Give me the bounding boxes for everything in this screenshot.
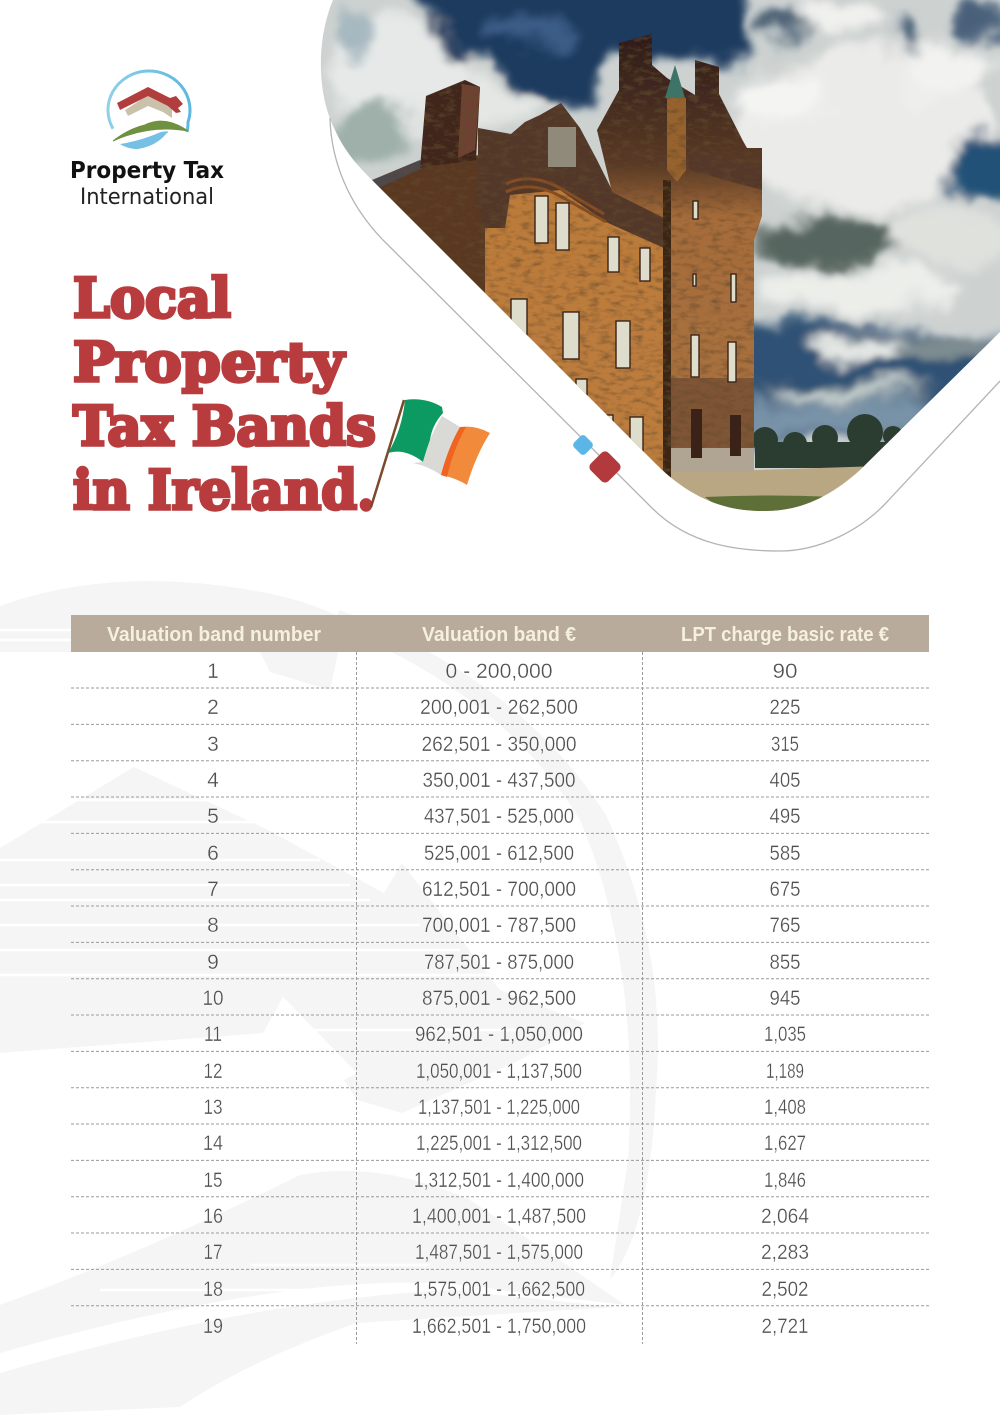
row 15: 15 [204,1169,222,1192]
row 9: 855 [770,951,800,974]
row 1 [207,660,798,683]
row 4: 405 [770,769,800,792]
row 2: 2 [207,696,219,719]
row 9 [207,951,800,974]
row 13 [204,1096,806,1119]
row 5: 437,501 - 525,000 [424,805,574,828]
row 17: 17 [204,1241,222,1264]
row 15: 1,312,501 - 1,400,000 [414,1169,584,1192]
row 12: 1,189 [766,1060,804,1083]
main wall [485,175,664,478]
sky and clouds [315,0,1000,440]
tower slots [691,409,702,458]
row 11 [204,1023,806,1046]
row 19: 19 [203,1315,223,1338]
round turret [667,98,686,182]
row 12 [204,1060,804,1083]
background watermark [0,581,658,1415]
row 5: 495 [770,805,800,828]
row 16 [203,1205,809,1228]
row 10 [202,987,800,1010]
logo roof [117,87,183,118]
logo ring [108,71,190,132]
title: Property [73,330,346,394]
table header: Valuation band number [107,623,321,646]
table header: Valuation band € [422,623,577,646]
lawn and gravel path [664,466,864,511]
row 14: 1,225,001 - 1,312,500 [416,1132,582,1155]
row 18 [203,1278,808,1301]
row 19: 2,721 [762,1315,808,1338]
crenellated parapet [689,167,762,190]
icon: red marker [587,449,623,485]
row 3: 315 [771,733,799,756]
row 14: 14 [203,1132,223,1155]
row 16: 16 [203,1205,223,1228]
gable moulded bands [506,179,606,222]
row 1: 0 - 200,000 [446,660,552,683]
table header: LPT charge basic rate € [681,623,890,646]
row 6: 585 [770,842,800,865]
row 19 [203,1315,808,1338]
row 18: 2,502 [762,1278,808,1301]
row 14 [203,1132,806,1155]
row 4: 4 [207,769,219,792]
row 19: 1,662,501 - 1,750,000 [412,1315,586,1338]
turret spire [665,65,685,98]
row 4: 350,001 - 437,500 [422,769,576,792]
row 8: 765 [770,914,800,937]
row 10: 875,001 - 962,500 [422,987,576,1010]
row 16: 2,064 [761,1205,809,1228]
row 2: 200,001 - 262,500 [420,696,578,719]
trees [752,414,903,468]
row 17: 2,283 [761,1241,809,1264]
row 6: 6 [207,842,219,865]
row 5: 5 [207,805,219,828]
row 13: 1,137,501 - 1,225,000 [418,1096,580,1119]
left chimney [420,80,480,168]
row 15: 1,846 [764,1169,806,1192]
row 7: 7 [207,878,219,901]
row 9: 787,501 - 875,000 [424,951,574,974]
title: in Ireland. [73,458,375,522]
row 9: 9 [207,951,219,974]
row 6 [207,842,800,865]
title: Tax Bands [73,394,376,458]
table header [71,615,929,652]
row 17 [204,1241,809,1264]
row 3: 3 [207,733,219,756]
title [73,266,376,522]
row 14: 1,627 [764,1132,806,1155]
row 18: 18 [203,1278,223,1301]
row 2 [207,696,800,719]
stepped gable [478,103,664,248]
row 7 [207,878,800,901]
row 15 [204,1169,806,1192]
logo subtitle: International [80,185,214,210]
row 8: 700,001 - 787,500 [422,914,576,937]
row 12: 1,050,001 - 1,137,500 [416,1060,582,1083]
row 12: 12 [204,1060,222,1083]
row 18: 1,575,001 - 1,662,500 [413,1278,585,1301]
logo [70,71,224,210]
row 8 [207,914,800,937]
row 11: 962,501 - 1,050,000 [415,1023,583,1046]
row 13: 13 [204,1096,222,1119]
logo water [120,131,168,149]
windows [511,196,736,457]
carved panel [548,127,576,167]
tower base weathered stone [671,448,754,472]
icon: blue marker [572,434,594,456]
row 1: 90 [772,660,798,683]
icon: Irish flag [371,399,490,507]
row 8: 8 [207,914,219,937]
row 5 [207,805,800,828]
row 16: 1,400,001 - 1,487,500 [412,1205,586,1228]
central tower [597,34,762,378]
row 3: 262,501 - 350,000 [422,733,576,756]
row 11: 1,035 [764,1023,806,1046]
table [71,615,929,1344]
row 3 [207,733,799,756]
row 2: 225 [770,696,800,719]
row 6: 525,001 - 612,500 [424,842,574,865]
row 17: 1,487,501 - 1,575,000 [415,1241,583,1264]
logo hill [113,121,188,141]
logo text: Property Tax [70,158,224,184]
title: Local [73,266,231,330]
row 4 [207,769,800,792]
tower shadow strip [663,180,671,478]
tower base [671,378,754,448]
photo: castle against cloudy sky [310,0,1000,520]
left wing [379,155,485,293]
row 10: 10 [202,987,224,1010]
row 7: 675 [770,878,800,901]
row 10: 945 [770,987,800,1010]
castle masonry [370,34,762,478]
row 7: 612,501 - 700,000 [422,878,576,901]
row 13: 1,408 [764,1096,806,1119]
tower slot right [730,415,741,456]
curved outline around photo [330,118,1000,551]
row 11: 11 [204,1023,222,1046]
row 1: 1 [207,660,219,683]
